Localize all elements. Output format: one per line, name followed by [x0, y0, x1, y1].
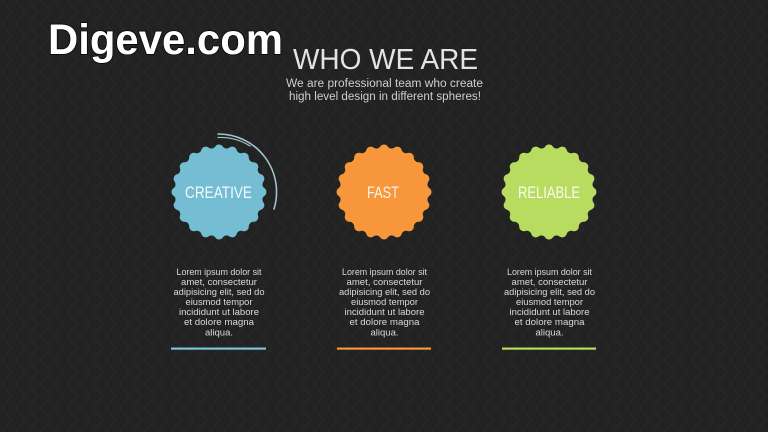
badge: fast	[337, 145, 431, 239]
subtitle	[286, 78, 483, 103]
underline	[171, 348, 266, 350]
panel: creative	[171, 134, 277, 350]
badge: reliable	[502, 145, 596, 239]
body text: Lorem ipsum dolor sit	[176, 267, 262, 278]
badge label: FAST	[367, 184, 399, 202]
panel: reliable	[502, 145, 596, 350]
body text: adipisicing elit, sed do	[174, 287, 264, 298]
body text: aliqua.	[536, 328, 564, 338]
badge label: CREATIVE	[185, 184, 252, 202]
body text: incididunt ut labore	[344, 307, 424, 318]
body text: eiusmod tempor	[186, 297, 253, 308]
body text: adipisicing elit, sed do	[504, 287, 595, 298]
body text: et dolore magna	[184, 317, 255, 328]
body text: adipisicing elit, sed do	[339, 287, 430, 298]
body text: amet, consectetur	[512, 277, 588, 288]
logo: Digeve.com: Digeve.com	[48, 16, 283, 64]
badge label: RELIABLE	[518, 184, 580, 202]
underline	[337, 348, 431, 350]
title: WHO WE ARE	[293, 44, 478, 76]
body text: amet, consectetur	[346, 277, 423, 288]
subtitle: high level design in different spheres!	[289, 91, 481, 103]
subtitle: We are professional team who create	[286, 78, 483, 90]
body text: eiusmod tempor	[516, 297, 584, 308]
body text: et dolore magna	[514, 317, 585, 328]
badge: creative	[172, 145, 266, 239]
body text: amet, consectetur	[181, 277, 258, 288]
icon: progress arc	[218, 134, 277, 209]
panel: fast	[337, 145, 431, 350]
body text	[174, 267, 264, 338]
body text: Lorem ipsum dolor sit	[507, 267, 592, 278]
body text: incididunt ut labore	[510, 307, 590, 318]
body text: incididunt ut labore	[179, 307, 259, 318]
body text: aliqua.	[370, 328, 398, 338]
body text	[504, 267, 595, 338]
body text: et dolore magna	[350, 317, 420, 328]
body text: Lorem ipsum dolor sit	[342, 267, 427, 278]
underline	[502, 348, 596, 350]
body text: aliqua.	[205, 328, 233, 338]
body text	[339, 267, 430, 338]
body text: eiusmod tempor	[351, 297, 419, 308]
